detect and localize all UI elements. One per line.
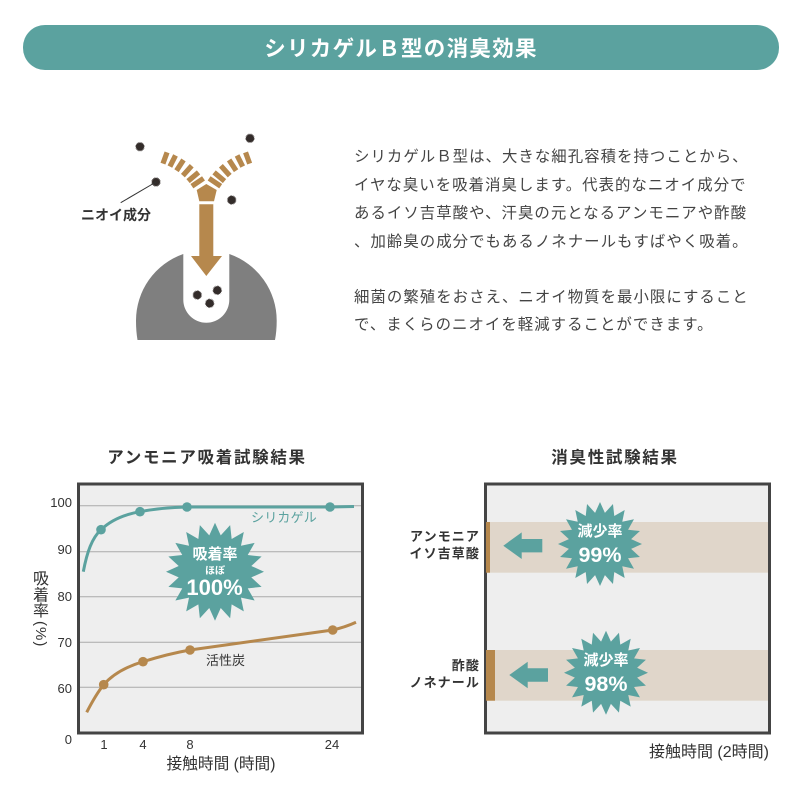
title banner: シリカゲルＢ型の消臭効果 <box>264 37 538 61</box>
description text: あるイソ吉草酸や、汗臭の元となるアンモニアや酢酸 <box>354 204 747 222</box>
row labels <box>409 529 480 690</box>
heading: deodorization test: 消臭性試験結果 <box>551 448 679 467</box>
activated carbon curve: 活性炭 <box>206 653 245 668</box>
band: acetic acid, nonenal: 98% <box>584 672 628 696</box>
y axis title: 率 <box>33 602 49 620</box>
starburst: nearly 100% <box>166 523 264 621</box>
x axis labels <box>100 737 339 752</box>
x axis labels: 4 <box>139 737 147 752</box>
silica gel body with pore <box>136 254 277 340</box>
y axis title <box>32 570 49 647</box>
row labels: ノネナール <box>409 675 480 690</box>
activated carbon curve <box>87 622 356 712</box>
description text <box>354 148 749 334</box>
description text: 、加齢臭の成分でもあるノネナールもすばやく吸着。 <box>354 232 749 250</box>
molecule pentagon and arms <box>161 151 252 201</box>
diagram: odor adsorption into silica pore <box>81 133 277 340</box>
starburst: nearly 100%: 吸着率 <box>192 545 238 563</box>
x axis labels: 1 <box>100 737 108 752</box>
title banner <box>23 25 779 70</box>
down arrow <box>191 204 222 276</box>
x axis title: 接触時間 (時間) <box>167 755 275 773</box>
row labels: イソ吉草酸 <box>409 546 480 561</box>
odor particles <box>135 133 255 308</box>
starburst: nearly 100%: ほぼ <box>205 564 225 577</box>
description text: シリカゲルＢ型は、大きな細孔容積を持つことから、 <box>354 148 749 166</box>
y axis labels: 0 <box>65 732 72 747</box>
x axis labels: 8 <box>186 737 194 752</box>
silica gel curve: シリカゲル <box>251 510 317 525</box>
x axis title: 接触時間 (2時間) <box>649 743 769 761</box>
description text: イヤな臭いを吸着消臭します。代表的なニオイ成分で <box>354 176 747 194</box>
y axis labels <box>50 495 72 747</box>
band: ammonia, isovaleric acid: 減少率 <box>577 522 623 540</box>
panel: deodorization results <box>409 484 770 761</box>
heading: ammonia test: アンモニア吸着試験結果 <box>107 447 307 467</box>
band: ammonia, isovaleric acid <box>486 502 768 586</box>
y axis title: 着 <box>33 586 49 604</box>
line chart: ammonia adsorption <box>32 484 362 773</box>
y axis title: 吸 <box>33 570 49 588</box>
y axis labels: 90 <box>58 542 72 557</box>
description text: で、まくらのニオイを軽減することができます。 <box>354 316 714 334</box>
x axis labels: 24 <box>325 737 339 752</box>
y axis labels: 100 <box>50 495 72 510</box>
description text: 細菌の繁殖をおさえ、ニオイ物質を最小限にすること <box>354 288 749 306</box>
y axis title: (%) <box>32 621 49 647</box>
band: acetic acid, nonenal <box>486 631 768 715</box>
y axis labels: 70 <box>58 635 72 650</box>
row labels: 酢酸 <box>452 658 480 673</box>
y axis labels: 60 <box>58 681 72 696</box>
band: ammonia, isovaleric acid: 99% <box>578 543 622 567</box>
silica gel curve <box>83 502 354 572</box>
y axis labels: 80 <box>58 589 72 604</box>
starburst: nearly 100%: 100% <box>186 575 243 600</box>
odor label: ニオイ成分 <box>81 207 151 223</box>
row labels: アンモニア <box>410 529 480 544</box>
band: acetic acid, nonenal: 減少率 <box>583 651 629 669</box>
